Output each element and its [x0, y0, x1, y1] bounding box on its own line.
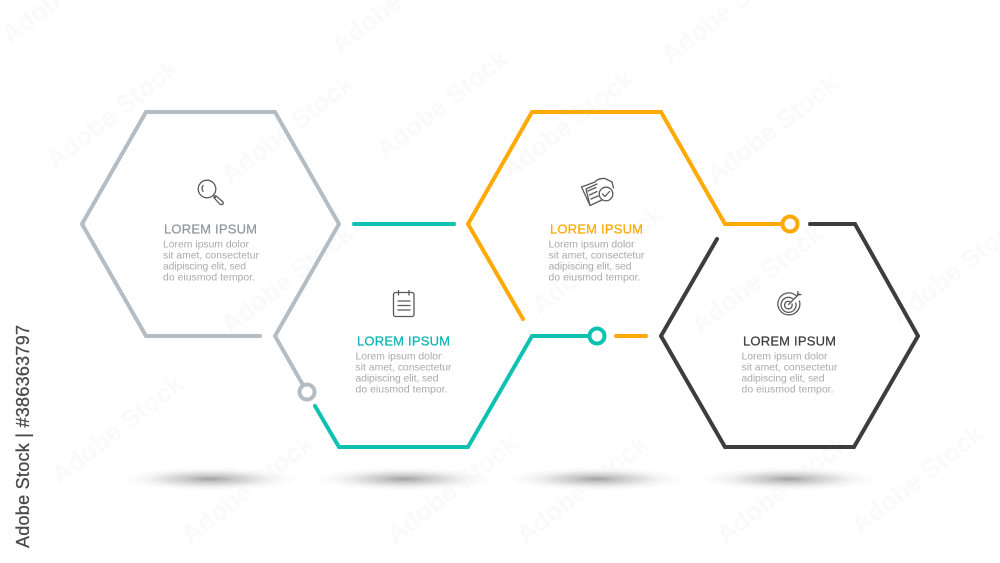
body — [548, 240, 645, 284]
body: sit amet, consectetur — [163, 250, 260, 262]
hexagon step 2: teal outline with connector node — [315, 224, 604, 447]
heading: LOREM IPSUM — [550, 222, 643, 236]
icon: notepad — [394, 290, 414, 316]
text block: step 1 — [163, 222, 260, 284]
heading: LOREM IPSUM — [164, 222, 257, 236]
body: sit amet, consectetur — [742, 362, 838, 374]
infographic canvas: Adobe Stock — [495, 63, 639, 185]
infographic canvas: Adobe Stock — [525, 198, 669, 320]
hexagon step 3: orange outline with connector node — [468, 112, 798, 336]
infographic canvas: Adobe Stock — [685, 218, 829, 340]
body: Lorem ipsum dolor — [548, 240, 635, 250]
body — [163, 240, 260, 284]
body: adipiscing elit, sed — [163, 262, 246, 272]
hexagon step 4: dark outline — [661, 224, 918, 447]
icon: open book with check badge — [582, 178, 614, 206]
body: do eiusmod tempor. — [163, 272, 255, 284]
body: do eiusmod tempor. — [742, 384, 834, 396]
hexagon step 1: grey outline with connector node — [82, 112, 339, 400]
infographic canvas: Adobe Stock — [215, 68, 359, 190]
infographic canvas: Adobe Stock — [40, 53, 184, 175]
body: Lorem ipsum dolor — [163, 240, 250, 250]
infographic canvas: Adobe Stock — [845, 418, 989, 540]
infographic canvas: Adobe Stock — [700, 68, 844, 190]
infographic canvas: Adobe Stock — [45, 368, 189, 490]
body: adipiscing elit, sed — [548, 262, 632, 272]
infographic canvas: Adobe Stock — [380, 428, 524, 550]
body — [356, 352, 452, 396]
text block: step 3 — [548, 222, 645, 284]
body — [742, 352, 838, 396]
icon: magnifying glass — [198, 180, 223, 205]
body: do eiusmod tempor. — [356, 384, 448, 396]
heading: LOREM IPSUM — [357, 334, 450, 348]
shadows under the hexagons — [112, 466, 887, 492]
body: Lorem ipsum dolor — [742, 352, 828, 362]
body: do eiusmod tempor. — [548, 272, 640, 284]
heading: LOREM IPSUM — [743, 334, 836, 348]
infographic canvas: Adobe Stock — [710, 428, 854, 550]
body: adipiscing elit, sed — [356, 374, 439, 384]
stock id caption: Adobe Stock | #386363797 — [13, 325, 33, 548]
text block: step 2 — [356, 334, 452, 396]
body: sit amet, consectetur — [356, 362, 452, 374]
icon: target with arrow — [778, 292, 801, 315]
infographic canvas: Adobe Stock — [175, 428, 319, 550]
body: sit amet, consectetur — [548, 250, 645, 262]
body: Lorem ipsum dolor — [356, 352, 442, 362]
text block: step 4 — [742, 334, 838, 396]
infographic canvas: Adobe Stock — [370, 43, 514, 165]
infographic canvas: Adobe Stock — [510, 428, 654, 550]
body: adipiscing elit, sed — [742, 374, 825, 384]
infographic canvas: Adobe Stock — [215, 218, 359, 340]
